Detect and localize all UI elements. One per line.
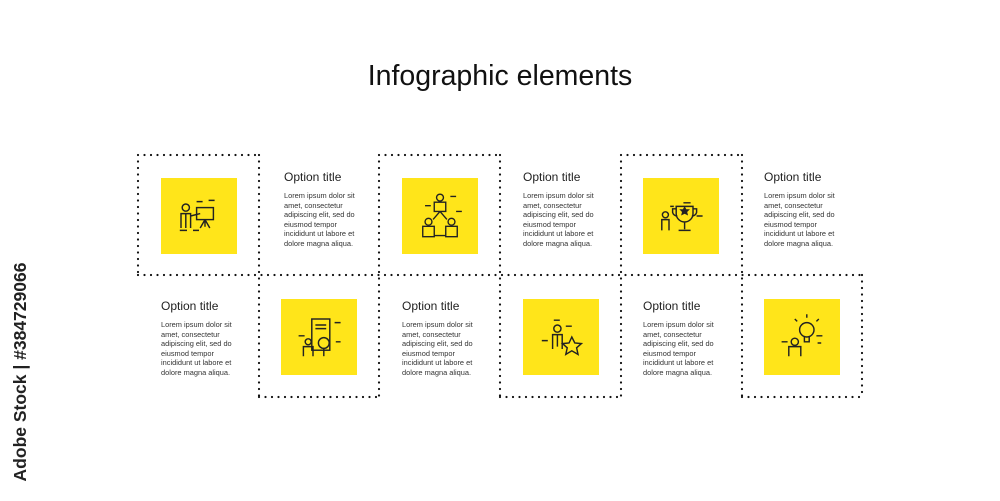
text: option 6: Lorem ipsum dolor sit amet, consectetur adipiscing elit, sed do eiusmod tempor incididunt ut labore et dolore magna aliqua.	[643, 320, 714, 376]
text: option 1: Option title	[284, 170, 341, 184]
icon: document search	[281, 299, 357, 375]
icon: presenter	[161, 178, 237, 254]
icon: team hierarchy	[402, 178, 478, 254]
text: option 1: Lorem ipsum dolor sit amet, consectetur adipiscing elit, sed do eiusmod tempor incididunt ut labore et dolore magna aliqua.	[284, 191, 355, 248]
icon: idea	[764, 299, 840, 375]
text: option 4: Option title	[161, 299, 218, 313]
text: option 3: Option title	[764, 170, 821, 184]
icon: trophy	[643, 178, 719, 254]
text: option 5: Lorem ipsum dolor sit amet, consectetur adipiscing elit, sed do eiusmod tempor incididunt ut labore et dolore magna aliqua.	[402, 320, 473, 376]
text: option 2: Lorem ipsum dolor sit amet, consectetur adipiscing elit, sed do eiusmod tempor incididunt ut labore et dolore magna aliqua.	[523, 191, 594, 248]
text: option 6: Option title	[643, 299, 700, 313]
text: option 5: Option title	[402, 299, 459, 313]
icon: star employee	[523, 299, 599, 375]
text: option 3: Lorem ipsum dolor sit amet, consectetur adipiscing elit, sed do eiusmod tempor incididunt ut labore et dolore magna aliqua.	[764, 191, 835, 248]
title: Infographic elements	[368, 60, 632, 92]
watermark: stock id: Adobe Stock | #384729066	[10, 263, 30, 481]
text: option 2: Option title	[523, 170, 580, 184]
text: option 4: Lorem ipsum dolor sit amet, consectetur adipiscing elit, sed do eiusmod tempor incididunt ut labore et dolore magna aliqua.	[161, 320, 232, 376]
